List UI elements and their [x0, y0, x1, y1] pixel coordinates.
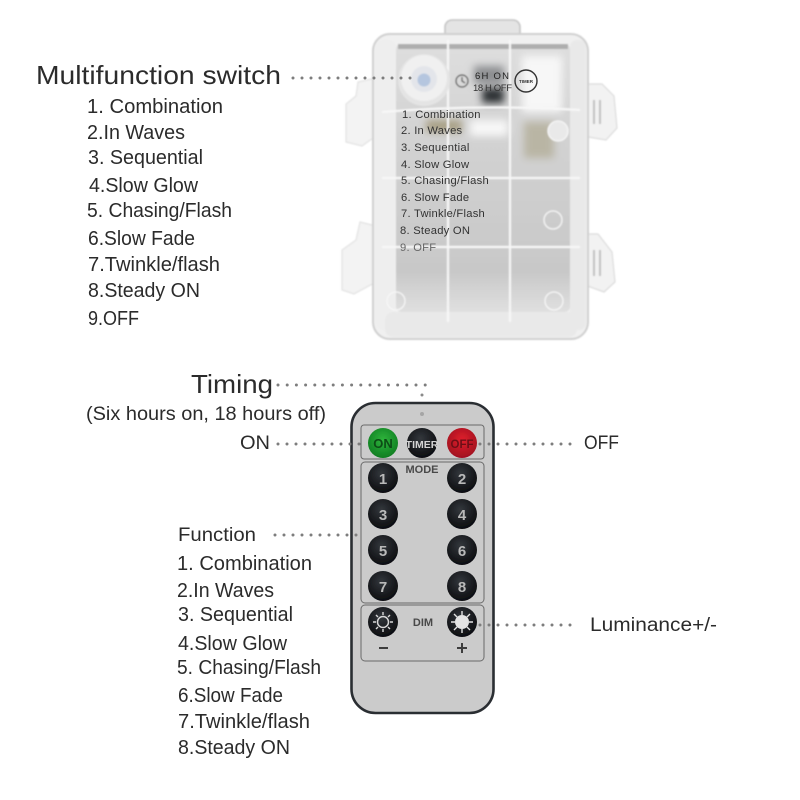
- label: MODE: MODE: [406, 464, 438, 476]
- label: plus: [457, 643, 467, 653]
- button: ON: [368, 428, 398, 458]
- dotted leader: timing drop: [420, 394, 424, 416]
- panel: power row: [361, 425, 484, 459]
- list: box modes: 4.Slow Glow: [89, 175, 199, 197]
- remote body: [352, 403, 494, 713]
- dotted leader: OFF: [480, 442, 571, 446]
- number buttons: [368, 463, 477, 601]
- printed mode list on box: 5. Chasing/Flash: [401, 175, 489, 187]
- remote control: [352, 403, 494, 713]
- number buttons: 2: [458, 471, 466, 488]
- printed mode list on box: 2. In Waves: [401, 125, 463, 137]
- printed mode list on box: [400, 109, 489, 254]
- icon: dim down: [368, 607, 398, 637]
- box inner area: [396, 44, 570, 312]
- list: box modes: 9.OFF: [88, 308, 139, 330]
- button: TIMER: TIMER: [406, 439, 439, 451]
- label: OFF: OFF: [584, 433, 619, 454]
- box outer shell: [373, 34, 588, 339]
- list: box modes: 3. Sequential: [88, 147, 203, 169]
- left clips: [342, 78, 376, 294]
- list: remote functions: 1. Combination: [177, 553, 312, 575]
- printed mode list on box: 6. Slow Fade: [401, 192, 469, 204]
- list: remote functions: 4.Slow Glow: [178, 633, 288, 655]
- label: ON: ON: [240, 433, 270, 454]
- list: box modes: 7.Twinkle/flash: [88, 254, 220, 276]
- list: box modes: 8.Steady ON: [88, 280, 200, 302]
- list: remote functions: 6.Slow Fade: [178, 685, 283, 707]
- printed mode list on box: 9. OFF: [400, 242, 436, 254]
- label: luminance: Luminance+/-: [590, 615, 717, 636]
- printed mode list on box: 3. Sequential: [401, 142, 470, 154]
- grid ribs: [382, 40, 580, 322]
- timer icon: [456, 75, 468, 87]
- timer label: 6H ON: [475, 71, 509, 82]
- icon: dim up: [447, 607, 477, 637]
- dotted leader: timing: [278, 384, 426, 386]
- heading: function: Function: [178, 524, 256, 546]
- panel: dim: [361, 605, 484, 661]
- button: TIMER: [406, 428, 439, 458]
- button: ON: ON: [373, 436, 393, 451]
- number buttons: 6: [458, 543, 466, 560]
- list: remote functions: 3. Sequential: [178, 604, 293, 626]
- list: remote functions: 2.In Waves: [177, 580, 274, 602]
- printed mode list on box: 1. Combination: [402, 109, 481, 121]
- list: box modes: 1. Combination: [87, 96, 223, 118]
- switch dial: [398, 54, 450, 106]
- list: box modes: 6.Slow Fade: [88, 228, 195, 250]
- dotted leader: ON: [278, 442, 368, 446]
- list: remote functions: 7.Twinkle/flash: [178, 711, 310, 733]
- top tab: [445, 20, 520, 44]
- list: remote functions: 5. Chasing/Flash: [177, 657, 321, 679]
- number buttons: 1: [379, 471, 387, 488]
- timing note: (Six hours on, 18 hours off): [86, 404, 326, 425]
- button: OFF: [447, 428, 477, 458]
- timer label: 18 H OFF: [473, 83, 512, 94]
- list: remote functions: 8.Steady ON: [178, 737, 290, 759]
- list: remote functions: [177, 553, 321, 759]
- printed mode list on box: 8. Steady ON: [400, 225, 470, 237]
- dotted leader: function: [275, 534, 361, 536]
- number buttons: 8: [458, 579, 466, 596]
- list: box modes: 5. Chasing/Flash: [87, 200, 232, 222]
- heading: multifunction switch: Multifunction switch: [36, 60, 281, 90]
- printed mode list on box: 4. Slow Glow: [401, 159, 470, 171]
- list: box modes: [87, 96, 232, 330]
- circuit shadows: [426, 56, 562, 158]
- number buttons: 4: [458, 507, 467, 524]
- screw holes: [387, 121, 568, 310]
- button: OFF: OFF: [450, 439, 474, 451]
- number buttons: 5: [379, 543, 387, 560]
- number buttons: 7: [379, 579, 387, 596]
- dotted leader: multifunction switch: [293, 76, 411, 80]
- timer label: TIMER: [519, 79, 534, 84]
- printed mode list on box: 7. Twinkle/Flash: [401, 208, 485, 220]
- list: box modes: 2.In Waves: [87, 122, 185, 144]
- panel: mode buttons: [361, 462, 484, 603]
- heading: timing: Timing: [191, 369, 273, 399]
- dotted leader: luminance: [480, 624, 576, 626]
- battery box photo: [342, 20, 617, 339]
- label: DIM: DIM: [413, 617, 433, 629]
- right clips: [582, 84, 617, 292]
- number buttons: 3: [379, 507, 387, 524]
- label: minus: [379, 647, 388, 649]
- timer label: [473, 70, 537, 94]
